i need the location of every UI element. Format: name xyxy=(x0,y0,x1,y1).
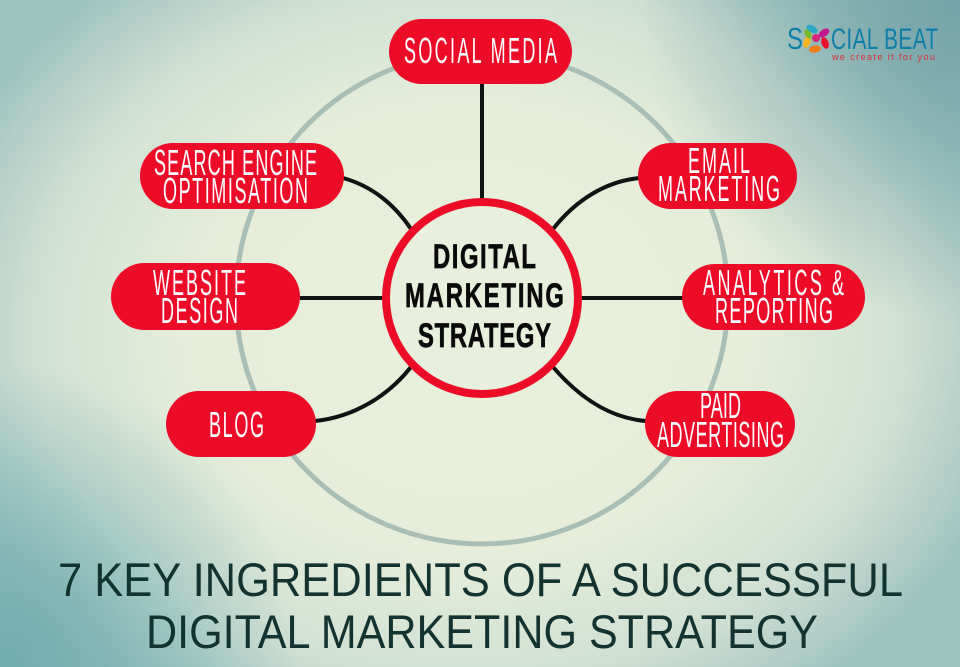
logo: social beat xyxy=(787,21,938,62)
pill: social media: SOCIAL MEDIA xyxy=(404,31,557,72)
outer ring xyxy=(236,52,728,544)
pill: paid advertising: ADVERTISING xyxy=(657,415,784,456)
centre hub: digital marketing strategy: MARKETING xyxy=(405,277,564,315)
pill: website design: WEBSITE xyxy=(153,263,246,304)
title: 7 KEY INGREDIENTS OF A SUCCESSFUL xyxy=(58,553,903,606)
title: DIGITAL MARKETING STRATEGY xyxy=(146,605,818,658)
centre hub: digital marketing strategy xyxy=(386,202,578,394)
logo: social beat: we create it for you xyxy=(831,52,935,62)
pill: paid advertising: PAID xyxy=(700,386,741,427)
centre hub: digital marketing strategy: STRATEGY xyxy=(418,317,551,355)
logo: social beat: CIAL BEAT xyxy=(831,24,938,56)
pill: email marketing: MARKETING xyxy=(658,169,780,210)
pill: email marketing xyxy=(638,141,797,210)
pill: analytics and reporting: ANALYTICS & xyxy=(703,263,844,304)
title xyxy=(58,553,903,658)
pill: website design: DESIGN xyxy=(161,291,238,332)
pill: search engine optimisation xyxy=(140,143,344,212)
icon: colourful pinwheel xyxy=(802,23,831,53)
connectors xyxy=(300,84,683,421)
pill: search engine optimisation: OPTIMISATION xyxy=(163,171,308,212)
centre hub: digital marketing strategy: DIGITAL xyxy=(433,238,536,276)
pill: search engine optimisation: SEARCH ENGINE xyxy=(154,143,317,184)
pill: paid advertising xyxy=(645,386,795,457)
pill: analytics and reporting: REPORTING xyxy=(715,291,833,332)
pill: social media xyxy=(389,19,572,84)
logo: social beat: S xyxy=(787,21,803,56)
pill: analytics and reporting xyxy=(682,263,865,332)
pill: blog: BLOG xyxy=(209,405,264,446)
pill: email marketing: EMAIL xyxy=(688,141,750,182)
pill: blog xyxy=(166,391,316,457)
pill: website design xyxy=(111,263,300,332)
